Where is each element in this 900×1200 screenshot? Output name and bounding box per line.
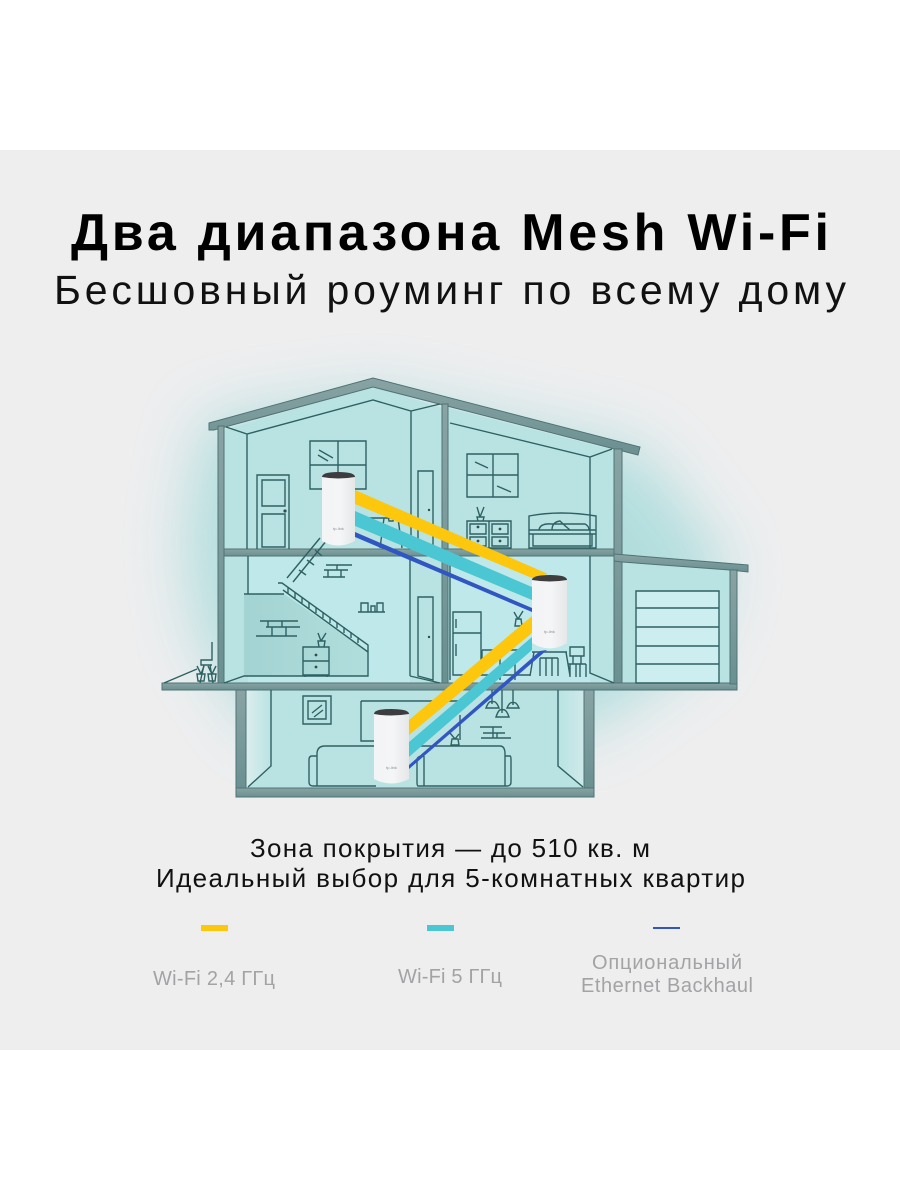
panel background: [0, 150, 900, 1050]
house structure: [162, 378, 748, 797]
label: Wi-Fi 2,4 ГГц: [153, 968, 275, 990]
lower left corridor lines: [224, 556, 440, 683]
signal bands lower: [409, 616, 547, 769]
pendant lamps: [486, 690, 519, 717]
router body: [532, 576, 567, 648]
router logo: tp-link: [544, 629, 555, 634]
door knobs: [283, 509, 501, 668]
legend: Wi-Fi 5 GHz: [398, 925, 502, 988]
lower closet door: [418, 597, 433, 680]
basement side walls: [246, 690, 271, 787]
shelf with jars: [358, 603, 385, 612]
basement left wall: [236, 690, 246, 789]
porch plants: [197, 666, 216, 681]
lighter back walls: [248, 556, 590, 683]
router bottom: [374, 709, 409, 784]
yellow band lower: [409, 616, 532, 735]
dresser: [467, 507, 511, 548]
upper stairs: [287, 538, 327, 582]
coverage text line one: Зона покрытия — до 510 кв. м: [250, 833, 650, 863]
lower staircase: [244, 583, 368, 652]
attic perspective lines: [226, 400, 612, 549]
title: Два диапазона Mesh Wi-Fi: [71, 204, 829, 262]
cyan band lower: [409, 637, 532, 757]
yellow swatch: [201, 925, 228, 931]
cyan band upper: [355, 511, 532, 600]
router body: [322, 473, 355, 546]
plant near router two: [514, 611, 523, 626]
dining table and chairs: [530, 647, 586, 677]
coverage glow: [185, 395, 725, 730]
router cap: [322, 472, 355, 478]
basement wall frame: [361, 701, 460, 741]
ground floor slab: [162, 683, 737, 690]
fridge: [453, 612, 481, 675]
signal bands upper: [355, 490, 548, 612]
coverage text line two: Идеальный выбор для 5-комнатных квартир: [156, 863, 745, 893]
basement right side wall: [558, 690, 584, 787]
left wall: [218, 426, 224, 684]
upper window right: [467, 454, 518, 497]
yellow band upper: [355, 490, 548, 578]
basement right wall: [584, 690, 594, 789]
interior line work: [164, 400, 719, 787]
router middle: [532, 575, 567, 648]
left door: [257, 475, 289, 549]
basement brick pattern: [480, 727, 511, 738]
label: Wi-Fi 5 ГГц: [398, 966, 502, 988]
label line one: Опциональный: [592, 952, 742, 974]
legend: Wi-Fi 2.4 GHz: [153, 925, 275, 990]
router cap: [374, 709, 409, 716]
basement picture: [303, 696, 331, 724]
perspective lines right room: [450, 556, 614, 683]
upper window left: [310, 441, 366, 489]
garage door: [636, 591, 719, 683]
under-stair shade: [244, 594, 368, 676]
garage wall: [730, 570, 737, 684]
upper brick pattern: [323, 565, 352, 577]
main roof: [209, 378, 640, 455]
router cap: [532, 575, 567, 582]
cyan swatch: [427, 925, 454, 931]
house illustration: [162, 378, 748, 797]
blue band upper: [355, 532, 532, 612]
room interiors: [224, 386, 730, 788]
right wall: [614, 449, 622, 685]
garage roof: [614, 554, 748, 572]
label line two: Ethernet Backhaul: [581, 975, 753, 997]
porch chair: [200, 642, 213, 683]
blue band lower: [409, 650, 547, 769]
basement floor: [236, 788, 594, 797]
nightstand: [303, 633, 329, 677]
lower brick pattern: [256, 621, 300, 636]
upper floor slab: [224, 549, 614, 556]
blue swatch: [653, 927, 680, 929]
upper closet door: [418, 471, 433, 549]
centre wall: [442, 404, 448, 684]
porch line: [164, 669, 197, 683]
legend: Ethernet Backhaul: [581, 927, 753, 997]
router logo: tp-link: [386, 765, 397, 770]
router body: [374, 710, 409, 784]
subtitle: Бесшовный роуминг по всему дому: [54, 267, 846, 313]
sofas: [309, 746, 511, 786]
kitchen counter: [482, 650, 530, 680]
plant near basement sofa: [450, 733, 459, 745]
bed: [529, 513, 596, 548]
table under router one: [366, 516, 403, 548]
router logo: tp-link: [333, 526, 344, 531]
router top: [322, 472, 355, 546]
basement perspective lines: [248, 690, 583, 787]
